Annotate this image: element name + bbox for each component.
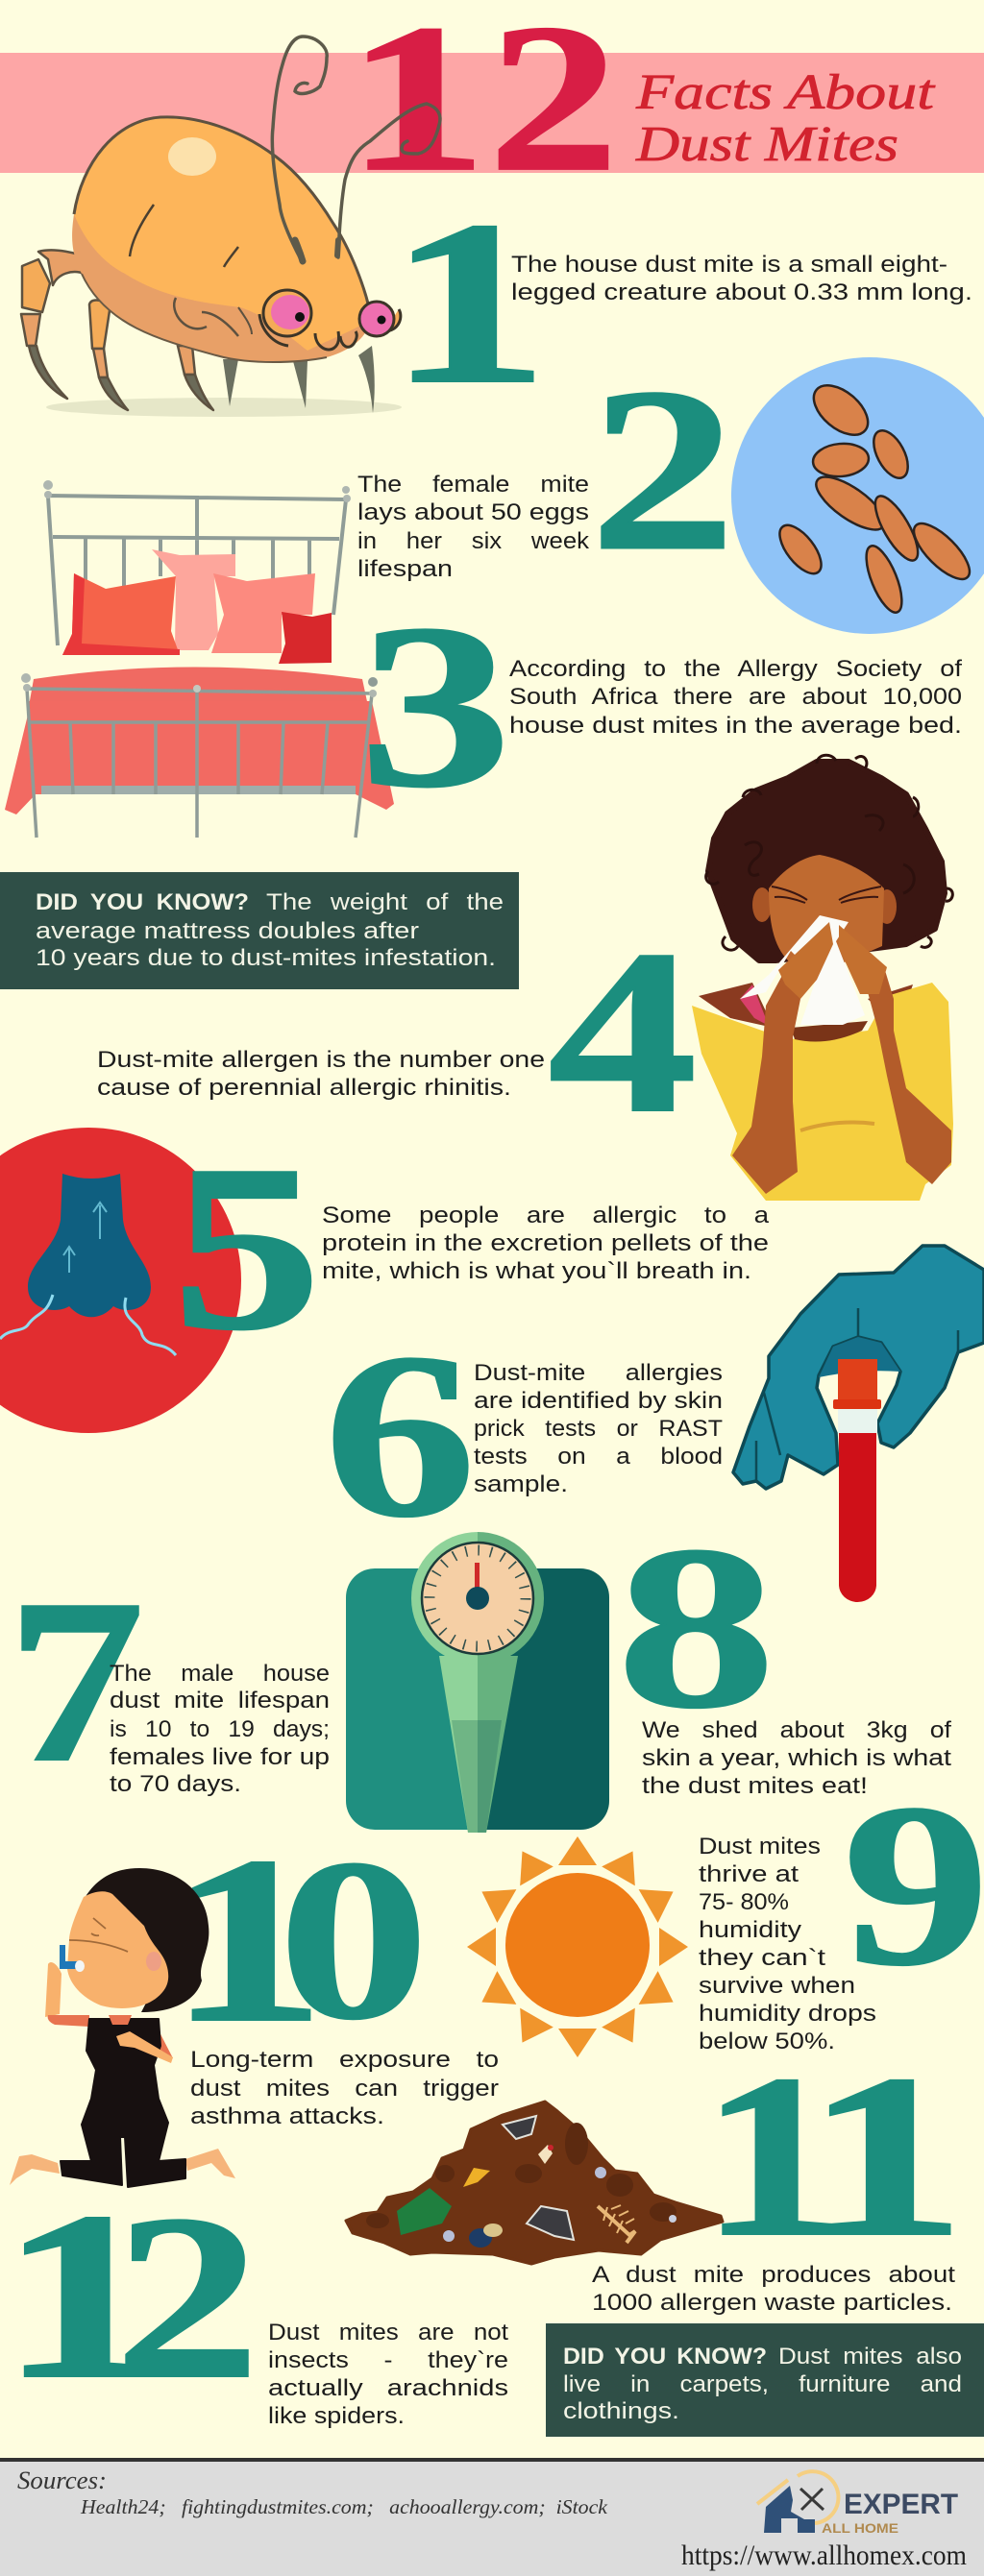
callout: did you know 2: live in carpets, furniture and — [563, 2371, 962, 2397]
icon: woman with inhaler — [10, 1868, 235, 2187]
sources — [17, 2467, 608, 2518]
number 10: 1 — [168, 1808, 326, 2073]
number 4: 4 — [548, 902, 698, 1161]
fact 8 text: the dust mites eat! — [642, 1773, 868, 1799]
fact 10 text: Long-term exposure to — [190, 2047, 499, 2073]
title: Dust Mites — [635, 117, 898, 172]
fact 3 text: According to the Allergy Society of — [509, 656, 962, 682]
fact 11 text: 1000 allergen waste particles. — [592, 2290, 952, 2316]
fact 6 text: are identified by skin — [474, 1388, 723, 1414]
sources: Health24; fightingdustmites.com; achooallergy.com; iStock — [80, 2495, 608, 2518]
number 8: 8 — [617, 1497, 775, 1756]
fact 5 text: mite, which is what you`ll breath in. — [322, 1258, 751, 1284]
fact 6 text: prick tests or RAST — [474, 1416, 723, 1442]
number 10: 0 — [279, 1812, 430, 2067]
number 6: 6 — [324, 1305, 477, 1566]
fact 12 text: like spiders. — [268, 2403, 405, 2429]
callout: did you know 1: DID YOU KNOW? — [36, 889, 249, 915]
callout: did you know 1: 10 years due to dust-mites infestation. — [36, 945, 496, 971]
fact 10 text — [190, 2047, 499, 2129]
fact 9 text: they can`t — [699, 1945, 825, 1971]
number 12: 1 — [0, 2162, 163, 2428]
website url: https://www.allhomex.com — [681, 2540, 967, 2571]
title: Facts About — [635, 65, 936, 120]
fact 2 text: lifespan — [357, 556, 453, 582]
fact 3 text: South Africa there are about 10,000 — [509, 684, 962, 710]
logo: expert all home — [757, 2471, 958, 2536]
fact 9 text: thrive at — [699, 1861, 799, 1887]
icon: dust mite — [21, 36, 440, 417]
fact 7 text: dust mite lifespan — [110, 1688, 330, 1713]
icon: nose on red circle — [0, 1128, 241, 1433]
fact 5 text: Some people are allergic to a — [322, 1203, 770, 1228]
fact 6 text — [474, 1360, 723, 1497]
fact 8 text: We shed about 3kg of — [642, 1717, 951, 1743]
fact 11 text: A dust mite produces about — [592, 2262, 955, 2288]
fact 7 text — [110, 1661, 330, 1797]
number 12 — [0, 2162, 260, 2428]
fact 11 text — [592, 2262, 955, 2316]
fact 3 text: house dust mites in the average bed. — [509, 713, 962, 739]
fact 10 text: asthma attacks. — [190, 2103, 384, 2129]
fact 6 text: sample. — [474, 1471, 568, 1497]
fact 12 text: Dust mites are not — [268, 2320, 508, 2345]
number 1: 1 — [387, 173, 550, 432]
icon: woman sneezing — [692, 755, 953, 1201]
icon: gloved hand holding blood tube — [733, 1246, 984, 1602]
fact 9 text: survive when — [699, 1973, 855, 1999]
number 7: 7 — [7, 1551, 145, 1810]
fact 9 text: below 50%. — [699, 2029, 835, 2054]
footer background — [0, 2458, 984, 2576]
fact 9 text — [699, 1834, 876, 2054]
number 11 — [700, 2027, 967, 2285]
number 11: 1 — [804, 2027, 967, 2285]
number 3: 3 — [359, 576, 511, 837]
fact 2 text — [357, 472, 590, 582]
number 11: 1 — [700, 2028, 846, 2285]
number 10 — [168, 1808, 430, 2073]
callout: did you know 2: DID YOU KNOW? — [563, 2344, 767, 2369]
fact 7 text: is 10 to 19 days; — [110, 1716, 330, 1742]
fact 9 text: humidity — [699, 1917, 801, 1943]
fact 12 text: insects - they`re — [268, 2347, 508, 2373]
fact 2 text: The female mite — [357, 472, 589, 498]
icon: sun — [467, 1836, 688, 2057]
callout: did you know 1: average mattress doubles after — [36, 918, 419, 944]
callout: did you know 2 — [546, 2323, 984, 2437]
fact 2 text: lays about 50 eggs — [357, 499, 589, 525]
icon: bathroom scale — [346, 1532, 609, 1833]
fact 9 text: humidity drops — [699, 2001, 876, 2027]
fact 4 text — [97, 1047, 545, 1101]
icon: waste pile — [346, 2102, 723, 2264]
fact 8 text: skin a year, which is what — [642, 1745, 951, 1771]
fact 3 text — [509, 656, 962, 739]
fact 4 text: cause of perennial allergic rhinitis. — [97, 1075, 511, 1101]
fact 2 text: in her six week — [357, 528, 590, 554]
fact 9 text: Dust mites — [699, 1834, 821, 1859]
fact 10 text: dust mites can trigger — [190, 2076, 499, 2102]
number 12: 2 — [114, 2166, 260, 2427]
title — [346, 0, 936, 215]
fact 1 text: The house dust mite is a small eight- — [511, 252, 947, 278]
callout: did you know 1: The weight of the — [266, 889, 504, 915]
logo: expert all home: ALL HOME — [822, 2520, 898, 2536]
callout: did you know 2: Dust mites also — [778, 2344, 962, 2369]
fact 12 text: actually arachnids — [268, 2375, 508, 2401]
fact 6 text: tests on a blood — [474, 1444, 723, 1470]
fact 5 text: protein in the excretion pellets of the — [322, 1230, 769, 1256]
fact 6 text: Dust-mite allergies — [474, 1360, 723, 1386]
icon: bed — [5, 480, 394, 838]
fact 12 text — [268, 2320, 508, 2429]
title banner — [0, 53, 984, 173]
number 5: 5 — [172, 1116, 321, 1379]
fact 1 text: legged creature about 0.33 mm long. — [511, 279, 972, 305]
fact 9 text: 75- 80% — [699, 1889, 789, 1915]
fact 7 text: females live for up — [110, 1744, 330, 1770]
icon: blue circle with eggs — [731, 357, 984, 634]
callout: did you know 2: clothings. — [563, 2398, 679, 2424]
logo: expert all home: EXPERT — [844, 2489, 958, 2520]
sources: Sources: — [17, 2467, 107, 2494]
fact 7 text: The male house — [110, 1661, 330, 1687]
fact 1 text — [511, 252, 972, 305]
number 2: 2 — [590, 340, 736, 599]
fact 5 text — [322, 1203, 770, 1284]
fact 4 text: Dust-mite allergen is the number one — [97, 1047, 545, 1073]
fact 8 text — [642, 1717, 951, 1799]
callout: did you know 1 — [0, 872, 519, 989]
fact 7 text: to 70 days. — [110, 1771, 241, 1797]
